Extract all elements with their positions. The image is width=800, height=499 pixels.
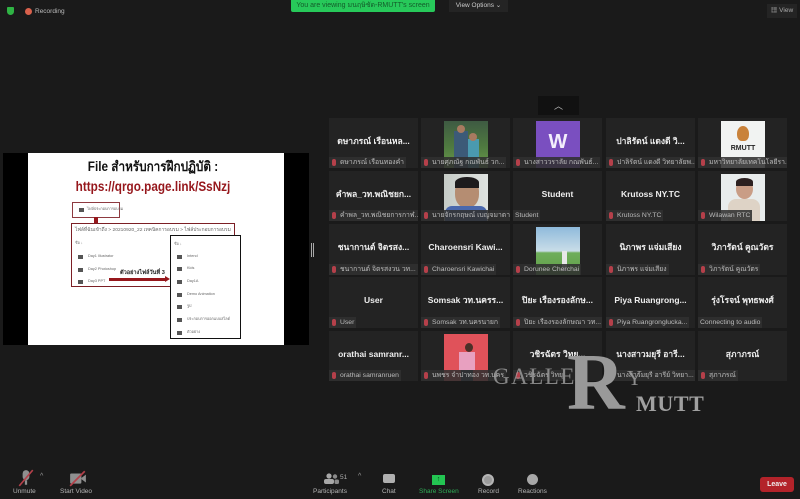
tile: row 3 col 2: Charoensri Kawichai — [432, 266, 494, 273]
caret: ^ — [358, 473, 361, 480]
sort header: ชื่อ ↓ — [174, 242, 182, 246]
sort header: ชื่อ ↓ — [75, 241, 83, 245]
subfolder rows: ตัวอย่าง — [187, 330, 200, 334]
tile: row 2 col 1: คำพล_วท.พณิชยก... — [336, 189, 411, 199]
tile: row 5 col 2 — [421, 331, 510, 381]
label: Chat — [382, 488, 396, 495]
tile: row 3 col 1 — [329, 224, 418, 275]
folder chip: ไฟล์ประกอบการอบรม — [87, 207, 123, 211]
tile: row 1 col 5 — [698, 118, 787, 168]
tile: row 4 col 1: User — [340, 319, 354, 326]
tile: row 1 col 2 — [421, 118, 510, 168]
tile: row 1 col 4: ปาลิรัตน์ แดงดี วิทยาลัยพ... — [617, 159, 695, 166]
tile: row 5 col 3: วชิรฉัตร วิทยุ... — [530, 349, 585, 359]
button: unmute — [13, 470, 44, 495]
icon: share arrow — [432, 475, 445, 485]
tile: row 4 col 1: User — [364, 295, 383, 305]
tile: row 3 col 4: นิภาพร แจ่มเสียง — [619, 242, 682, 252]
button: reactions — [518, 474, 547, 495]
button: leave — [760, 477, 794, 492]
tile: row 2 col 5 — [698, 171, 787, 221]
tile: row 2 col 3: Student — [515, 212, 538, 219]
tile: row 2 col 3: Student — [542, 189, 573, 199]
button: scroll gallery up — [538, 96, 579, 115]
tile: row 2 col 4: Krutoss NY.TC — [617, 212, 661, 219]
slide link: https://qrgo.page.link/SsNzj — [76, 179, 230, 194]
banner: screen share notice: You are viewing มนฤษิชัด-RMUTT's screen — [296, 2, 430, 9]
button: record — [478, 474, 499, 495]
tile: row 1 col 3: นางสาววราลัย กณพันธ์... — [524, 159, 598, 166]
button: leave: Leave — [767, 481, 787, 488]
tile: row 1 col 5: RMUTT — [731, 145, 755, 152]
tile: row 5 col 4 — [606, 331, 695, 381]
tile: row 1 col 3: W — [549, 131, 567, 153]
icon: security shield — [7, 7, 14, 15]
folder rows — [78, 254, 116, 284]
watermark big letter: R — [567, 339, 625, 427]
tile: row 3 col 5 — [698, 224, 787, 275]
tile: row 1 col 2: นายศุภณัฐ กณพันธ์ วก... — [432, 159, 504, 166]
label: Share Screen — [419, 488, 459, 495]
tile: row 4 col 1 — [329, 277, 418, 328]
watermark: Gallery RMUTT — [493, 339, 704, 427]
button: scroll gallery up: ︿ — [554, 101, 563, 111]
tile: row 2 col 1: คำพล_วท.พณิชยการกาฬ... — [340, 212, 418, 219]
tile: row 4 col 5: Connecting to audio — [700, 319, 760, 326]
tile: row 1 col 4 — [606, 118, 695, 168]
tile: row 3 col 4: นิภาพร แจ่มเสียง — [617, 266, 667, 273]
tile: row 2 col 1 — [329, 171, 418, 221]
watermark word: GALLE — [493, 364, 576, 389]
button: start video — [60, 470, 92, 495]
tile: row 2 col 5: Wilawan RTC — [709, 212, 750, 219]
tile: row 3 col 2 — [421, 224, 510, 275]
tile: row 5 col 3: วชิรฉัตร วิทยุ — [524, 372, 563, 379]
tile: row 2 col 2: นายจักรกฤษณ์ เบญจมาตา — [432, 212, 510, 219]
tile: row 5 col 5: สุภาภรณ์ — [726, 349, 759, 359]
tile: row 4 col 5: รุ่งโรจน์ พุทธพงศ์ — [711, 295, 774, 305]
tile: row 3 col 5: วิภารัตน์ คูณวัตร — [709, 266, 758, 273]
tile: row 4 col 2: Somsak วท.นครร... — [428, 295, 503, 305]
tile: row 4 col 3 — [513, 277, 602, 328]
tile: row 4 col 2: Somsak วท.นครนายก — [432, 319, 498, 326]
icon: record — [482, 474, 494, 486]
tile: row 1 col 3 — [513, 118, 602, 168]
button: view options: View Options ⌄ — [456, 2, 501, 9]
icon: video off — [70, 470, 86, 486]
tile: row 3 col 1: ชนากานต์ จิตรสงวน วท... — [340, 266, 416, 273]
arrow: to subfolder list — [109, 278, 166, 281]
icon: smiley — [527, 474, 538, 485]
tile: row 3 col 3 — [513, 224, 602, 275]
participant count: 51 — [340, 474, 347, 481]
tile: row 3 col 2: Charoensri Kawi... — [428, 242, 503, 252]
tile: row 5 col 3 — [513, 331, 602, 381]
subfolder rows: ประกอบการออกแบบสไลด์ — [187, 317, 230, 321]
tile: row 4 col 3: ปิยะ เรืองรองลักษ... — [522, 295, 593, 305]
subfolder rows: Kids — [187, 266, 194, 270]
slide title: File สำหรับการฝึกปฏิบัติ : — [88, 159, 218, 174]
example caption: ตัวอย่างไฟล์วันที่ 3 — [120, 270, 165, 276]
watermark small letter: Y — [627, 366, 642, 390]
tile: row 2 col 4 — [606, 171, 695, 221]
tile: row 5 col 5: สุภาภรณ์ — [709, 372, 736, 379]
subfolder rows: Day1A — [187, 279, 198, 283]
label: Participants — [313, 488, 347, 495]
folder chip — [72, 202, 120, 218]
subfolder rows — [177, 254, 230, 335]
subfolder rows: Demo Animation — [187, 292, 215, 296]
button: chat — [382, 474, 396, 495]
tile: row 1 col 1: ดษาภรณ์ เรือนหล... — [337, 136, 410, 146]
slide page — [28, 153, 284, 345]
label: Reactions — [518, 488, 547, 495]
splitter handle — [311, 243, 314, 257]
tile: row 3 col 5: วิภารัตน์ คูณวัตร — [712, 242, 773, 252]
tile: row 3 col 4 — [606, 224, 695, 275]
folder rows: Day2 Photoshop — [88, 267, 116, 271]
icon: participants — [324, 473, 339, 484]
tile: row 5 col 4: นางสาวมยุรี อารี... — [616, 349, 685, 359]
recording label: Recording — [35, 8, 65, 15]
tile: row 1 col 1 — [329, 118, 418, 168]
arrow: down to folder list — [94, 217, 98, 226]
subfolder rows: รูป — [187, 304, 191, 308]
button: share screen — [419, 475, 459, 495]
subfolder rows: Intend — [187, 254, 198, 258]
button: view: ▦ View — [771, 7, 793, 14]
tile: row 1 col 4: ปาลิรัตน์ แดงดี วิ... — [616, 136, 685, 146]
tile: row 2 col 2 — [421, 171, 510, 221]
caret: ^ — [40, 473, 43, 480]
tile: row 2 col 3 — [513, 171, 602, 221]
icon: recording dot — [25, 8, 32, 15]
tile: row 4 col 2 — [421, 277, 510, 328]
tile: row 4 col 3: ปิยะ เรืองรองลักษณา วท... — [524, 319, 601, 326]
label: Record — [478, 488, 499, 495]
label: Start Video — [60, 488, 92, 495]
button: view options — [449, 0, 508, 12]
tile: row 4 col 4 — [606, 277, 695, 328]
folder rows: Day1 Illustrator — [88, 254, 114, 258]
tile: row 5 col 4: นางสาวมยุรี อารีย์ วิทยา... — [617, 372, 694, 379]
tile: row 5 col 1: orathai samranruen — [340, 372, 399, 379]
banner: screen share notice — [291, 0, 435, 12]
tile: row 5 col 5 — [698, 331, 787, 381]
tile: row 3 col 3: Dorunee Cherchai — [524, 266, 579, 273]
panel: participant gallery — [329, 118, 787, 381]
tile: row 4 col 5 — [698, 277, 787, 328]
tile: row 4 col 4: Piya Ruangronglucka... — [617, 319, 687, 326]
tile: row 1 col 1: ดษาภรณ์ เรือนทองคำ — [340, 159, 404, 166]
tile: row 3 col 1: ชนากานต์ จิตรสง... — [338, 242, 409, 252]
folder rows: Day3 PPT — [88, 279, 105, 283]
breadcrumb: ไฟล์ที่ฉันเข้าถึง > 20210920_22 เทคนิคการอบรม > ไฟล์ประกอบการอบรม — [75, 228, 231, 233]
panel: shared slide — [3, 153, 309, 345]
tile: row 5 col 1 — [329, 331, 418, 381]
label: Unmute — [13, 488, 36, 495]
top bar: security and recording — [7, 7, 65, 15]
toolbar — [13, 470, 794, 495]
tile: row 2 col 4: Krutoss NY.TC — [621, 189, 680, 199]
icon: muted mic — [18, 470, 34, 486]
icon: chat bubble — [383, 474, 395, 483]
button: view — [767, 4, 797, 18]
tile: row 5 col 2: นพชร จำปาทอง วท.นคร — [432, 372, 504, 379]
folder list panel — [71, 223, 235, 287]
tile: row 4 col 4: Piya Ruangrong... — [614, 295, 687, 305]
icon: share arrow: ↑ — [437, 476, 440, 483]
watermark word: MUTT — [636, 391, 704, 416]
button: participants — [313, 472, 362, 495]
arrow head — [165, 276, 170, 282]
subfolder list panel — [170, 235, 241, 339]
tile: row 5 col 1: orathai samranr... — [338, 349, 409, 359]
